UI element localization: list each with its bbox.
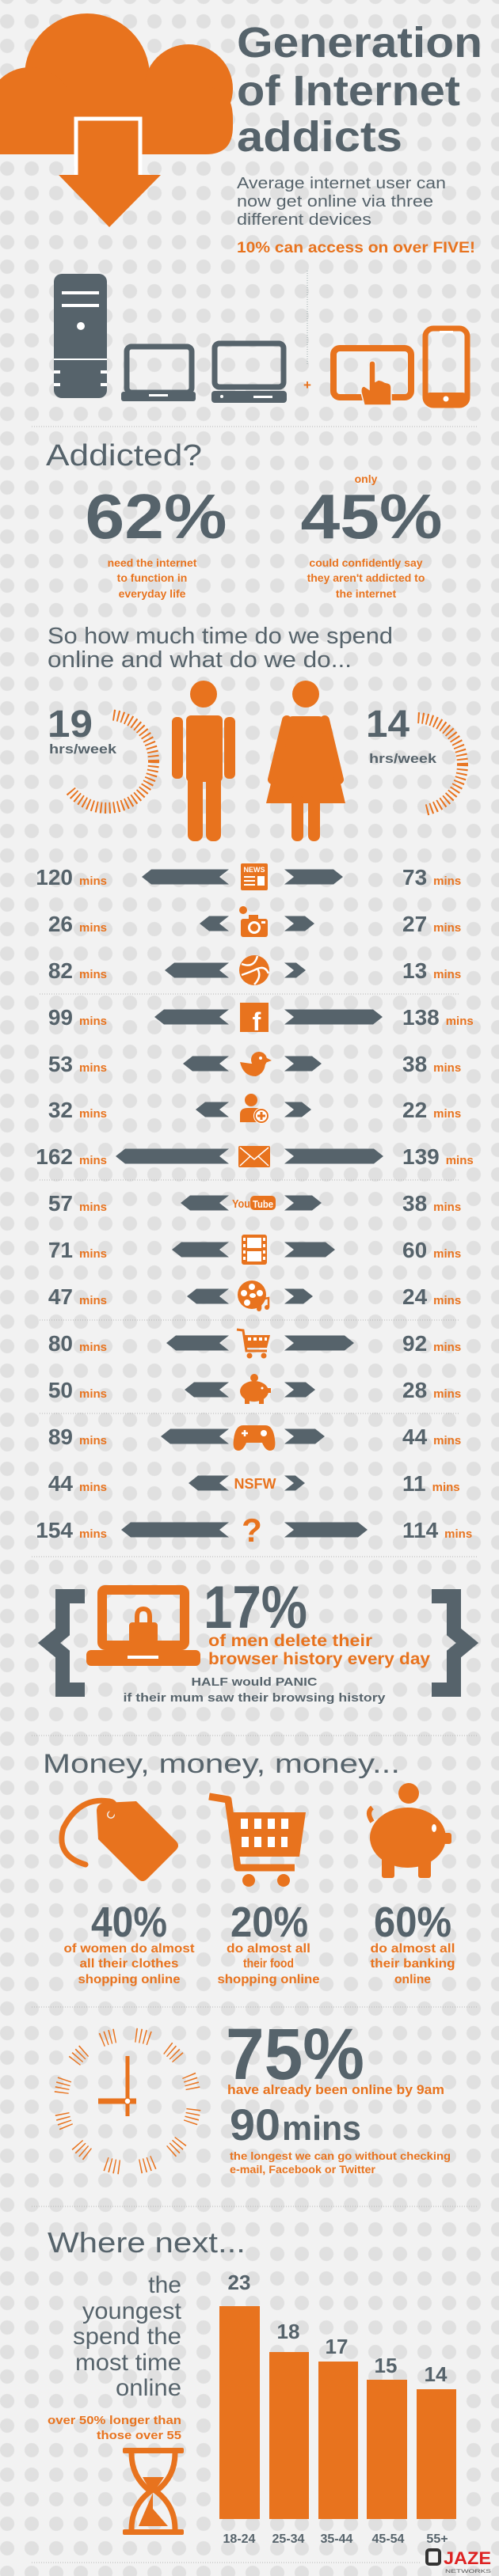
panel: browser history callout: of men delete their (208, 1632, 372, 1650)
stat: 45%: they aren't addicted to (307, 571, 425, 584)
panel: food shopping (209, 1796, 320, 1986)
bar chart: hours per week by age: 15 (375, 2354, 397, 2377)
text: youngest spend most time: spend the (73, 2324, 181, 2350)
icon: desktop tower (54, 274, 107, 398)
stat: 90 mins: 90 (230, 2100, 280, 2149)
panel: banking: their banking (371, 1957, 455, 1971)
bar chart: hours per week by age: 23 (228, 2271, 250, 2294)
row: music and video: 47 mins (48, 1284, 107, 1309)
row: other (36, 1512, 472, 1549)
icon: tablet with hand (333, 348, 411, 405)
text: youngest spend most time: online (116, 2375, 181, 2401)
panel: banking: online (394, 1973, 431, 1986)
logo: JAZE networks: JAZE (444, 2548, 491, 2568)
stat: women 14 hrs/week (366, 704, 463, 811)
row: other: 154 mins (36, 1518, 107, 1542)
icon: piggy bank (369, 1783, 451, 1878)
stat: 45%: the internet (336, 587, 396, 600)
row: twitter: 53 mins (48, 1052, 107, 1076)
stat: 90 mins: mins (282, 2109, 361, 2148)
row: youtube: You (232, 1197, 250, 1211)
panel: banking: 60% (374, 1899, 451, 1946)
row: youtube: 38 mins (402, 1191, 461, 1216)
row: facebook: 138 mins (402, 1005, 474, 1030)
row: gaming: 44 mins (402, 1425, 461, 1449)
text: youngest spend most time: youngest (82, 2298, 182, 2324)
bar chart: hours per week by age: 18-24 (223, 2532, 256, 2546)
chart: activity minutes men vs women (36, 863, 474, 1549)
panel: food shopping: shopping online (217, 1973, 320, 1986)
row: social add (48, 1094, 461, 1124)
bar chart: hours per week by age: 17 (326, 2335, 348, 2358)
panel: clothes shopping: all their clothes (79, 1957, 179, 1971)
divider vertical (307, 271, 308, 364)
bar chart: hours per week by age: 25-34 (272, 2532, 305, 2546)
bar chart: hours per week by age (219, 2271, 456, 2546)
stat: 90 mins: e-mail, Facebook or Twitter (230, 2163, 376, 2176)
row: film (48, 1235, 461, 1265)
panel: clothes shopping (62, 1800, 195, 1986)
subtitle text: Average internet user can (237, 175, 446, 192)
icon: hourglass (123, 2448, 184, 2535)
row: twitter: 38 mins (402, 1052, 461, 1076)
icon: monitor (211, 343, 287, 403)
icon: clock (61, 2035, 194, 2168)
stat: women 14 hrs/week: 14 (366, 704, 409, 745)
subtitle text: now get online via three (237, 193, 433, 211)
icon: price tag (62, 1800, 178, 1881)
row: shopping (48, 1330, 461, 1358)
panel: clothes shopping: 40% (91, 1899, 167, 1946)
subtitle text: different devices (237, 211, 371, 229)
row: news: 120 mins (36, 865, 107, 890)
stat: men 19 hrs/week (48, 704, 154, 808)
row: film: 60 mins (402, 1238, 461, 1262)
row: facebook: 99 mins (48, 1005, 107, 1030)
icon: left brace (49, 1596, 85, 1690)
stat: 90 mins (230, 2100, 451, 2176)
row: facebook (48, 1003, 474, 1036)
stat: 62%: 62% (86, 481, 227, 552)
title: addicts (237, 113, 402, 161)
row: facebook: f (253, 1007, 261, 1036)
bar chart: hours per week by age: 55+ (426, 2532, 448, 2546)
heading: Addicted?: Addicted? (46, 439, 202, 472)
row: banking (48, 1374, 461, 1404)
stat: 75% online by 9am: 75% (226, 2014, 364, 2095)
row: nsfw: 44 mins (48, 1471, 107, 1496)
bar chart: hours per week by age: 18 (277, 2320, 299, 2343)
row: gaming (48, 1425, 461, 1451)
row: photos: 27 mins (402, 912, 461, 936)
row: social add: 32 mins (48, 1098, 107, 1122)
row: banking: 50 mins (48, 1378, 107, 1402)
row: news (36, 863, 461, 890)
logo: JAZE networks (427, 2548, 491, 2574)
row: sport (48, 955, 461, 985)
stat: 45% (301, 472, 442, 600)
row: nsfw: NSFW (234, 1476, 276, 1492)
panel: browser history callout (49, 1574, 467, 1705)
row: sport: 13 mins (402, 958, 461, 983)
stat: 62%: to function in (117, 571, 187, 584)
row: social add: 22 mins (402, 1098, 461, 1122)
stat: 62%: everyday life (119, 587, 186, 600)
icon: man figure (172, 681, 235, 841)
text: youngest spend most time: the (148, 2272, 181, 2298)
stat: 17%: 17% (204, 1574, 307, 1641)
row: email: 162 mins (36, 1144, 107, 1169)
row: sport: 82 mins (48, 958, 107, 983)
row: youtube: Tube (253, 1198, 273, 1210)
stat: 75% online by 9am: have already been online by 9am (227, 2082, 444, 2097)
text: youngest spend most time (73, 2272, 182, 2401)
icon: smartphone (425, 328, 467, 405)
subtitle text (237, 175, 446, 229)
row: nsfw: 11 mins (402, 1471, 460, 1496)
stat: 75% online by 9am (226, 2014, 444, 2097)
row: youtube: 57 mins (48, 1191, 107, 1216)
row: music and video (48, 1280, 461, 1311)
row: nsfw (48, 1471, 460, 1496)
stat: men 19 hrs/week: hrs/week (49, 742, 117, 757)
stat: women 14 hrs/week: hrs/week (369, 751, 437, 766)
icon: laptop with lock (86, 1590, 200, 1666)
row: email: 139 mins (402, 1144, 474, 1169)
stat: 62%: need the internet (108, 556, 197, 569)
row: shopping: 80 mins (48, 1331, 107, 1356)
panel: food shopping: their food (243, 1957, 294, 1971)
row: photos: 26 mins (48, 912, 107, 936)
row: other: 114 mins (402, 1518, 472, 1542)
panel: browser history callout: if their mum saw their browsing history (124, 1691, 386, 1705)
row: other: ? (242, 1512, 262, 1549)
row: shopping: 92 mins (402, 1331, 461, 1356)
icon: plus: + (303, 377, 311, 393)
text: youngest spend most time: most time (75, 2350, 181, 2376)
heading: time spent: So how much time do we spend (48, 624, 393, 649)
heading: time spent (48, 624, 393, 673)
stat: men 19 hrs/week: 19 (48, 704, 93, 745)
callout: over 50% longer: over 50% longer than (48, 2414, 181, 2427)
bar chart: hours per week by age: 14 (425, 2362, 448, 2386)
row: gaming: 89 mins (48, 1425, 107, 1449)
row: email (36, 1144, 474, 1169)
callout: over 50% longer (48, 2414, 181, 2442)
row: banking: 28 mins (402, 1378, 461, 1402)
icon: shopping cart (209, 1796, 306, 1887)
panel: clothes shopping: shopping online (78, 1973, 181, 1986)
stat: 45%: could confidently say (309, 556, 423, 569)
row: music and video: 24 mins (402, 1284, 461, 1309)
bar chart: hours per week by age: 35-44 (321, 2532, 353, 2546)
row: film: 71 mins (48, 1238, 107, 1262)
stat: 62% (86, 481, 227, 600)
panel: browser history callout: browser history every day (208, 1650, 430, 1668)
heading: time spent: online and what do we do... (48, 647, 352, 673)
heading: where next: Where next... (48, 2226, 246, 2259)
stat: 45%: 45% (301, 481, 442, 552)
title: of Internet (237, 67, 460, 115)
icon: right brace (432, 1596, 467, 1690)
logo: JAZE networks: NETWORKS (445, 2570, 491, 2574)
panel: banking (369, 1783, 455, 1986)
bar chart: hours per week by age: 45-54 (372, 2532, 405, 2546)
callout: 10% five devices: 10% can access on over FIVE! (237, 240, 475, 256)
stat: 45%: only (355, 472, 378, 485)
icon: cloud with download arrow (0, 13, 233, 227)
row: photos (48, 906, 461, 937)
title (237, 19, 482, 161)
row: twitter (48, 1052, 461, 1076)
panel: browser history callout: HALF would PANIC (192, 1675, 318, 1689)
panel: clothes shopping: of women do almost (63, 1942, 195, 1956)
icon: woman figure (266, 681, 345, 841)
row: news: NEWS (244, 866, 265, 874)
panel: food shopping: do almost all (227, 1942, 310, 1956)
row: youtube (48, 1191, 461, 1216)
heading: money: Money, money, money... (43, 1749, 400, 1779)
icon: laptop (121, 347, 196, 401)
stat: 90 mins: the longest we can go without checking (230, 2149, 451, 2162)
panel: food shopping: 20% (230, 1899, 308, 1946)
row: news: 73 mins (402, 865, 461, 890)
panel: banking: do almost all (371, 1942, 455, 1956)
callout: over 50% longer: those over 55 (97, 2429, 181, 2442)
title: Generation (237, 19, 482, 66)
